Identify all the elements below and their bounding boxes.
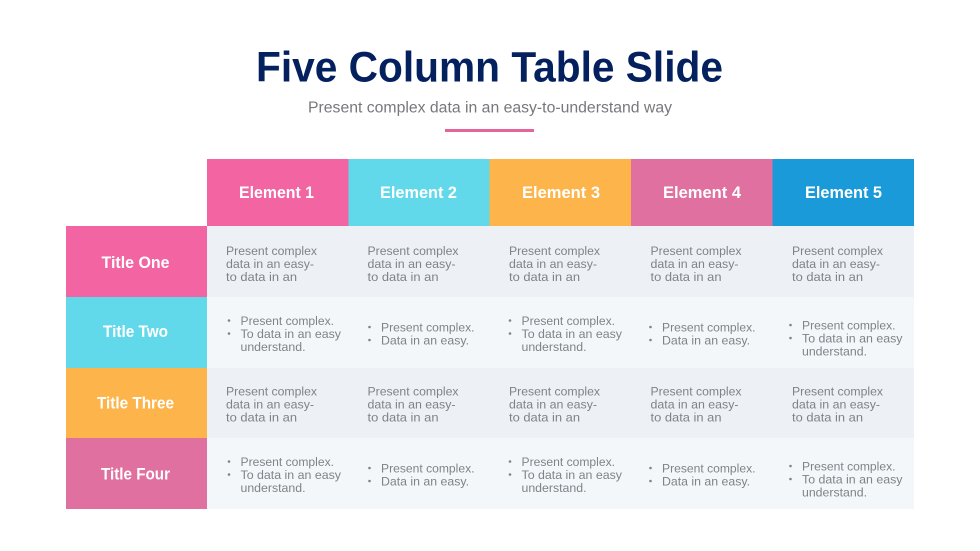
row header: Title Two bbox=[66, 297, 207, 368]
column header: Element 5 bbox=[772, 159, 914, 226]
row 1 cells: data in an easy- bbox=[368, 257, 456, 271]
row 1 cells: Present complex bbox=[792, 244, 884, 258]
row 1 cells: Present complex bbox=[650, 244, 742, 258]
row 3 cells: to data in an bbox=[226, 410, 297, 424]
row 4 cells: Data in an easy. bbox=[662, 474, 750, 488]
row 2 cells: Data in an easy. bbox=[662, 334, 750, 348]
row header: Title Four bbox=[66, 438, 207, 509]
row 3 cells: Present complex bbox=[509, 384, 601, 398]
row 1 cells: to data in an bbox=[368, 270, 439, 284]
row 3 cells: Present complex bbox=[792, 384, 884, 398]
row header: Title Three bbox=[66, 368, 207, 438]
row 4 cells: Data in an easy. bbox=[381, 474, 469, 488]
row 4 cells: Present complex. bbox=[240, 455, 334, 469]
row 3 cells bbox=[226, 384, 884, 424]
row 1 cells: to data in an bbox=[650, 270, 722, 284]
table bbox=[66, 159, 914, 509]
accent rule bbox=[445, 129, 534, 132]
row backgrounds bbox=[207, 226, 914, 509]
row 2 cells: understand. bbox=[522, 340, 586, 354]
column header: Element 5: Element 5 bbox=[805, 183, 882, 202]
column header: Element 4: Element 4 bbox=[663, 183, 742, 202]
row 3 cells: to data in an bbox=[368, 410, 439, 424]
row 4 cells: understand. bbox=[522, 481, 586, 495]
row 3 cells: data in an easy- bbox=[226, 398, 314, 412]
row 1 cells: to data in an bbox=[226, 270, 297, 284]
row 2 cells: Present complex. bbox=[522, 314, 615, 328]
row 2 cells: Present complex. bbox=[240, 314, 334, 328]
column header: Element 3 bbox=[490, 159, 631, 226]
row 4 cells: To data in an easy bbox=[522, 468, 623, 482]
row 3 cells: data in an easy- bbox=[368, 398, 456, 412]
row 3 cells: Present complex bbox=[650, 384, 742, 398]
row 3 cells: to data in an bbox=[650, 410, 722, 424]
row 2 cells: understand. bbox=[240, 340, 306, 354]
row header: Title Three: Title Three bbox=[97, 394, 174, 412]
row 4 cells: understand. bbox=[802, 486, 867, 500]
row 2 cells: To data in an easy bbox=[240, 327, 342, 341]
column header: Element 1 bbox=[207, 159, 348, 226]
row header: Title One bbox=[66, 226, 207, 297]
row header: Title Four: Title Four bbox=[101, 464, 170, 484]
column header: Element 1: Element 1 bbox=[239, 183, 314, 202]
row 3 cells: Present complex bbox=[226, 384, 318, 398]
row 1 cells: data in an easy- bbox=[509, 257, 597, 271]
row 3 cells: Present complex bbox=[368, 384, 459, 398]
row 3 cells: to data in an bbox=[509, 410, 580, 424]
column header: Element 3: Element 3 bbox=[522, 183, 600, 202]
row 2 cells: Present complex. bbox=[381, 320, 474, 334]
row 1 cells: Present complex bbox=[509, 244, 601, 258]
row 4 cells: To data in an easy bbox=[240, 468, 342, 482]
row 3 cells: data in an easy- bbox=[650, 398, 738, 412]
column header: Element 4 bbox=[631, 159, 772, 226]
column header: Element 2: Element 2 bbox=[380, 183, 457, 202]
column header: Element 2 bbox=[348, 159, 490, 226]
row 3 cells: data in an easy- bbox=[792, 398, 880, 412]
row 1 cells: data in an easy- bbox=[792, 257, 880, 271]
row 2 cells: To data in an easy bbox=[522, 327, 623, 341]
row 2 cells: Present complex. bbox=[802, 318, 896, 332]
row 4 cells: understand. bbox=[240, 481, 306, 495]
row 2 cells bbox=[228, 314, 903, 358]
row 4 cells bbox=[228, 455, 903, 500]
row 1 cells: Present complex bbox=[226, 244, 318, 258]
row 3 cells: data in an easy- bbox=[509, 398, 597, 412]
row 1 cells: data in an easy- bbox=[650, 257, 738, 271]
row 3 cells: to data in an bbox=[792, 410, 863, 424]
row 4 cells: Present complex. bbox=[662, 462, 756, 476]
row 1 cells: to data in an bbox=[509, 270, 580, 284]
row 4 cells: To data in an easy bbox=[802, 472, 903, 486]
subtitle: Present complex data in an easy-to-understand way bbox=[308, 100, 672, 116]
row 4 cells: Present complex. bbox=[522, 455, 615, 469]
row 2 cells: Data in an easy. bbox=[381, 334, 469, 348]
row header: Title One: Title One bbox=[102, 253, 170, 272]
title: Five Column Table Slide bbox=[256, 44, 723, 92]
row 4 cells: Present complex. bbox=[381, 462, 474, 476]
row header: Title Two: Title Two bbox=[103, 322, 168, 341]
row 2 cells: To data in an easy bbox=[802, 332, 903, 346]
row 1 cells: data in an easy- bbox=[226, 257, 314, 271]
row 2 cells: Present complex. bbox=[662, 320, 756, 334]
row 1 cells: Present complex bbox=[368, 244, 459, 258]
row 2 cells: understand. bbox=[802, 344, 867, 358]
row 1 cells: to data in an bbox=[792, 270, 863, 284]
row 4 cells: Present complex. bbox=[802, 460, 896, 474]
row 1 cells bbox=[226, 244, 884, 284]
